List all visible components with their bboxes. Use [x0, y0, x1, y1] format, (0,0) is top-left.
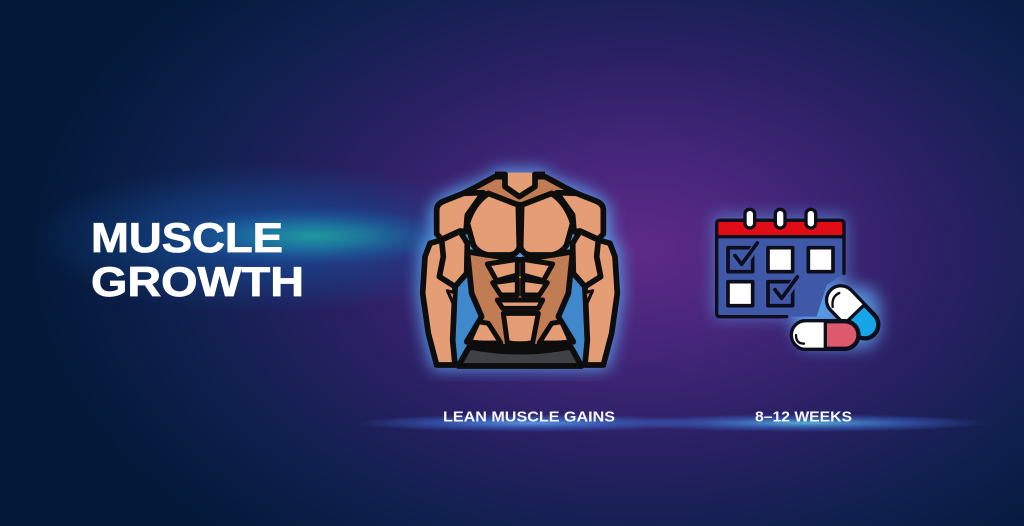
- left shoulder: [437, 193, 483, 239]
- check marks: [743, 243, 797, 299]
- torso glow: [421, 173, 619, 366]
- left arm: [423, 240, 455, 365]
- neck and traps: [460, 177, 580, 205]
- forearm details: [447, 291, 593, 304]
- title: [91, 214, 304, 305]
- title: MUSCLE: [91, 214, 283, 261]
- calendar header: [717, 220, 844, 237]
- date cells: [728, 248, 833, 306]
- pill: red and white: [791, 321, 859, 349]
- gap behind arms: [452, 273, 588, 360]
- abdomen shade: [467, 252, 573, 347]
- neck top bar: [495, 167, 545, 181]
- left glow: [20, 160, 520, 316]
- neck: [505, 173, 535, 197]
- labels: [443, 408, 852, 426]
- abs: [469, 259, 571, 344]
- right arm: [585, 240, 617, 365]
- icon: calendar and pills: [713, 209, 885, 349]
- calendar body: [717, 237, 844, 317]
- label: lean muscle gains: LEAN MUSCLE GAINS: [443, 408, 615, 426]
- title: GROWTH: [91, 258, 304, 305]
- right pec: [521, 193, 573, 255]
- icon: muscular torso: [421, 173, 619, 366]
- left bicep: [439, 231, 467, 287]
- pill: blue and white: [821, 280, 885, 345]
- left pec: [467, 193, 519, 255]
- right bicep: [573, 231, 601, 287]
- belt: [458, 347, 582, 366]
- label glow lines: [350, 412, 990, 434]
- right shoulder: [557, 193, 603, 239]
- label: 8-12 weeks: 8–12 WEEKS: [755, 408, 852, 426]
- icon glow: [713, 215, 880, 348]
- binding rings: [745, 209, 816, 228]
